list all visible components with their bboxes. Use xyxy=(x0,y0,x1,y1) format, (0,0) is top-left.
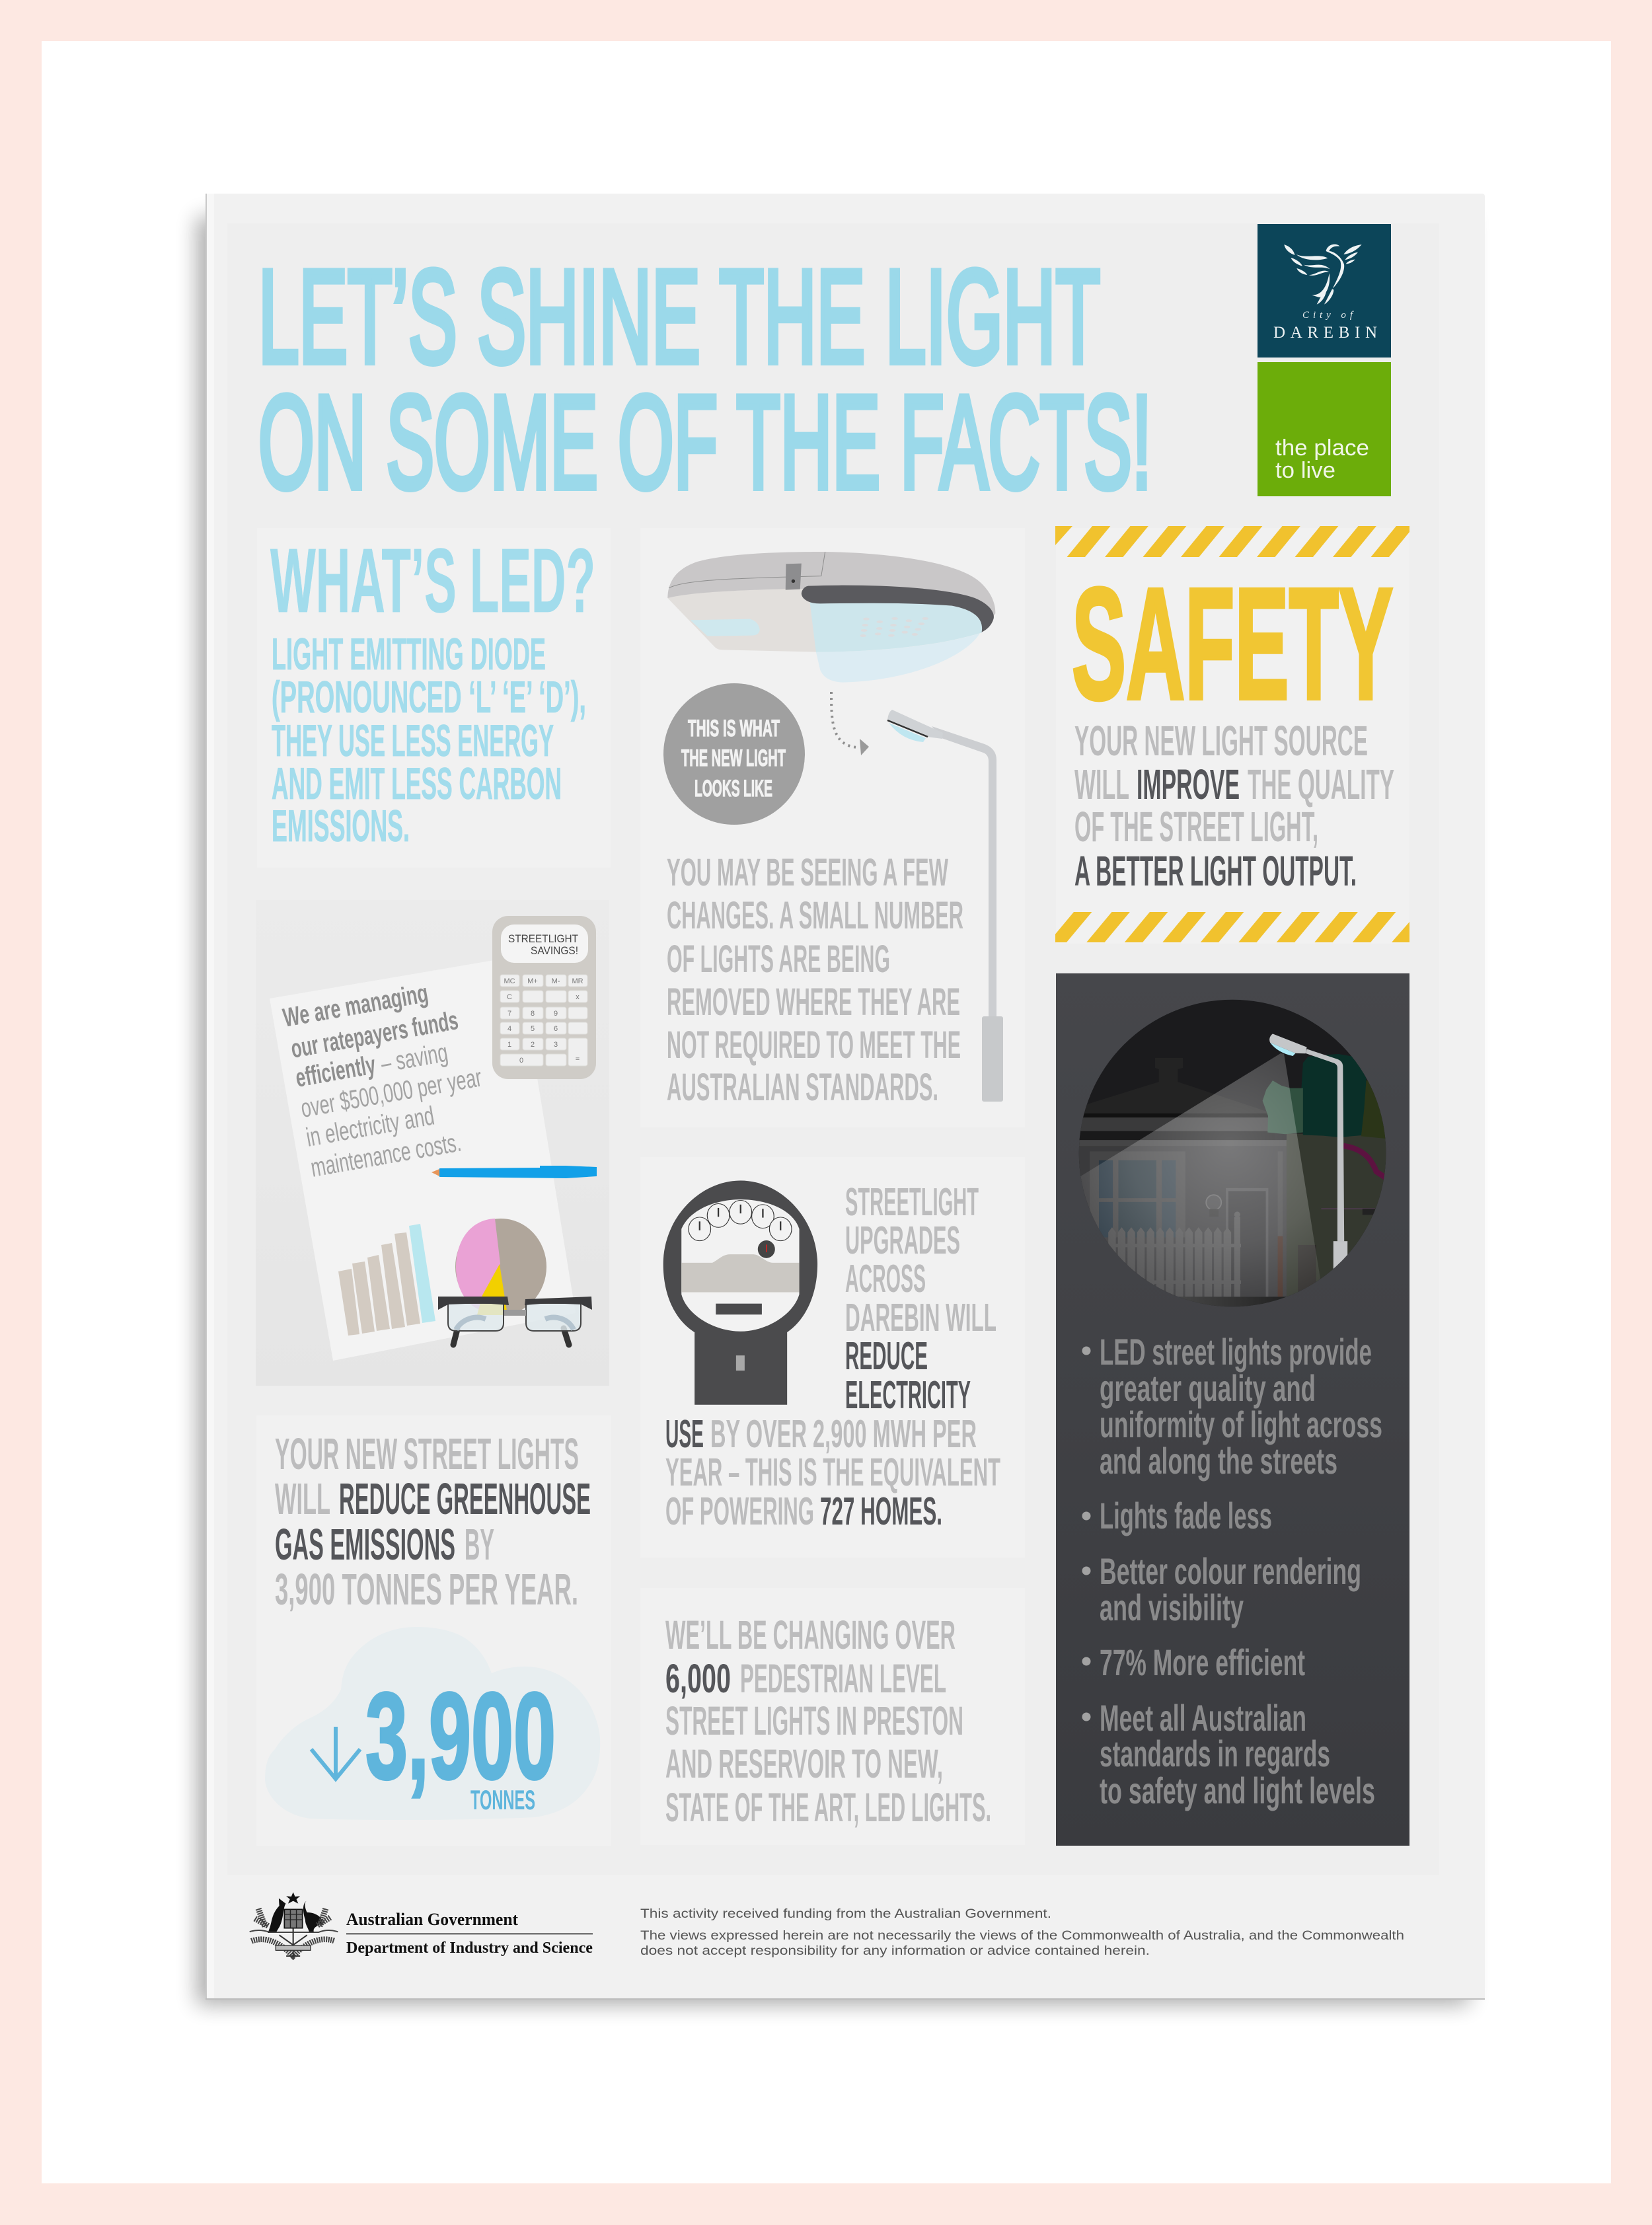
illustration: calculator: M- xyxy=(552,977,560,985)
illustration: calculator: 7 xyxy=(507,1010,511,1018)
footer: Australian Government crest xyxy=(250,1892,593,1957)
body text: BY xyxy=(465,1520,494,1569)
title xyxy=(258,243,1152,516)
logo: the place to live xyxy=(1258,362,1391,496)
paper text: in electricity and xyxy=(304,1101,437,1152)
paper text xyxy=(281,979,484,1183)
panel: greenhouse emissions: REDUCE GREENHOUSE xyxy=(339,1474,591,1524)
small meter xyxy=(1205,1194,1222,1209)
text block below meter xyxy=(665,1412,1000,1533)
body text: (PRONOUNCED ‘L’ ‘E’ ‘D’), xyxy=(272,672,586,722)
trees and garden xyxy=(1263,1054,1388,1308)
panel: safety xyxy=(1055,526,1409,944)
illustration: calculator: 8 xyxy=(531,1010,535,1018)
hazard stripes top xyxy=(1055,526,1409,557)
bar chart xyxy=(338,1224,435,1336)
panel: electricity xyxy=(640,1157,1025,1558)
bullet list: and visibility xyxy=(1100,1587,1244,1628)
bullet list: and along the streets xyxy=(1100,1440,1337,1482)
footer: funding disclaimer xyxy=(640,1907,1404,1958)
logo: the place to live: to live xyxy=(1275,458,1335,483)
panel: pedestrian lights: WE’LL BE CHANGING OVER xyxy=(665,1612,956,1657)
body text: EMISSIONS. xyxy=(272,801,410,851)
illustration: calculator: 6 xyxy=(554,1025,558,1033)
illustration: LED lamp head xyxy=(667,552,995,683)
bullet list: greater quality and xyxy=(1100,1367,1316,1409)
logo text: DAREBIN xyxy=(1273,324,1377,342)
body text: THE QUALITY xyxy=(1248,761,1394,808)
figure: 3,900 tonnes: TONNES xyxy=(470,1784,535,1815)
roof and chimney xyxy=(1079,1106,1287,1146)
bullet list: to safety and light levels xyxy=(1100,1770,1375,1811)
panel: pedestrian lights: STATE OF THE ART, LED LIGHTS. xyxy=(665,1785,991,1830)
body text: IMPROVE xyxy=(1137,761,1240,808)
figure: 3,900 tonnes: 3,900 xyxy=(365,1668,556,1805)
bullet list: Better colour rendering xyxy=(1100,1550,1361,1592)
door xyxy=(1226,1188,1268,1297)
illustration: calculator: 2 xyxy=(531,1041,535,1049)
bullet list: Meet all Australian xyxy=(1100,1697,1306,1739)
illustration: calculator: 5 xyxy=(531,1025,535,1033)
bin and posts xyxy=(1278,1231,1316,1297)
panel: pedestrian lights: AND RESERVOIR TO NEW, xyxy=(665,1741,943,1786)
body text: CHANGES. A SMALL NUMBER xyxy=(667,894,963,937)
illustration: calculator: MR xyxy=(572,977,583,985)
panel: greenhouse emissions xyxy=(256,1415,611,1846)
bullet list: 77% More efficient xyxy=(1100,1641,1305,1683)
logo: the place to live: the place xyxy=(1275,435,1369,461)
window xyxy=(1090,1151,1185,1237)
icon: bird xyxy=(1284,245,1362,305)
government name: Australian Government xyxy=(346,1910,518,1929)
panel: what's LED xyxy=(257,528,611,868)
text block beside meter: STREETLIGHT xyxy=(845,1180,979,1224)
body text: AND EMIT LESS CARBON xyxy=(272,759,562,809)
illustration: calculator: MC xyxy=(504,977,515,985)
illustration: night scene xyxy=(1078,999,1388,1310)
illustration: calculator: 1 xyxy=(507,1041,511,1049)
body text: WILL xyxy=(1074,761,1129,808)
figure: 3,900 tonnes xyxy=(365,1668,556,1815)
panel: dark benefits xyxy=(1056,973,1409,1846)
callout: this is what the new light looks like: THIS IS WHAT xyxy=(688,716,780,741)
fence xyxy=(1096,1211,1241,1297)
footer: funding disclaimer: The views expressed herein are not necessarily the views of the Commonwealth of Australia, and the Commonwealth xyxy=(640,1929,1404,1943)
arrow: dotted pointer xyxy=(831,692,869,755)
illustration: calculator: = xyxy=(576,1055,580,1063)
text block beside meter: DAREBIN WILL xyxy=(845,1296,996,1339)
bullet list: Lights fade less xyxy=(1100,1495,1272,1536)
body text: OF LIGHTS ARE BEING xyxy=(667,938,890,981)
illustration: calculator: C xyxy=(507,993,512,1001)
illustration: calculator: M+ xyxy=(527,977,538,985)
paper text: – saving xyxy=(379,1038,450,1078)
panel: pedestrian lights: 6,000 xyxy=(665,1656,731,1701)
body text: LIGHT EMITTING DIODE xyxy=(272,629,546,679)
body text: OF THE STREET LIGHT, xyxy=(1074,803,1318,850)
illustration: glasses xyxy=(438,1297,592,1345)
panel: pedestrian lights: PEDESTRIAN LEVEL xyxy=(740,1656,946,1701)
hazard stripes bottom xyxy=(1055,912,1409,942)
illustration: electricity meter xyxy=(663,1180,817,1405)
text block beside meter: REDUCE xyxy=(845,1334,928,1378)
body text: A BETTER LIGHT OUTPUT. xyxy=(1074,847,1357,895)
text block beside meter: ACROSS xyxy=(845,1257,926,1301)
body text: WILL xyxy=(275,1474,330,1524)
illustration: pen xyxy=(432,1166,597,1178)
ground xyxy=(1179,1297,1285,1306)
heading: WHAT’S LED? xyxy=(270,530,595,632)
callout: this is what the new light looks like: THE NEW LIGHT xyxy=(681,745,786,771)
panel: savings xyxy=(256,900,609,1386)
illustration: calculator: x xyxy=(576,993,580,1001)
text block beside meter: ELECTRICITY xyxy=(845,1373,971,1417)
body text: YOU MAY BE SEEING A FEW xyxy=(667,851,948,894)
paper text: over $500,000 per year xyxy=(299,1063,484,1123)
illustration: calculator: 3 xyxy=(554,1041,558,1049)
illustration: calculator xyxy=(492,916,596,1079)
paper text: efficiently xyxy=(293,1050,378,1093)
illustration: paper sheet xyxy=(270,956,576,1361)
bullet list xyxy=(1082,1331,1382,1811)
body text: 3,900 TONNES PER YEAR. xyxy=(275,1565,578,1614)
paper text: We are managing xyxy=(281,979,430,1033)
body text: AUSTRALIAN STANDARDS. xyxy=(667,1066,938,1109)
illustration: calculator: SAVINGS! xyxy=(531,944,578,957)
illustration: calculator: 0 xyxy=(519,1057,523,1065)
logo: City of Darebin xyxy=(1258,224,1391,358)
bullet list: LED street lights provide xyxy=(1100,1331,1372,1373)
illustration: street light xyxy=(887,710,1003,1102)
body text xyxy=(272,629,586,851)
pie chart xyxy=(455,1219,546,1315)
footer: funding disclaimer: This activity received funding from the Australian Government. xyxy=(640,1907,1051,1921)
panel: pedestrian lights xyxy=(640,1588,1025,1845)
footer: funding disclaimer: does not accept responsibility for any information or advice contained herein. xyxy=(640,1944,1150,1958)
text block beside meter xyxy=(845,1180,996,1417)
body text: THEY USE LESS ENERGY xyxy=(272,716,554,766)
illustration: calculator: 4 xyxy=(507,1025,511,1033)
paper text: our ratepayers funds xyxy=(289,1006,461,1064)
bullet list: uniformity of light across xyxy=(1100,1404,1382,1445)
light beam xyxy=(1078,1053,1323,1297)
poster shadow xyxy=(197,217,1469,2005)
text block below meter: YEAR – THIS IS THE EQUIVALENT xyxy=(665,1451,1000,1494)
house wall xyxy=(1078,1147,1287,1297)
body text: NOT REQUIRED TO MEET THE xyxy=(667,1024,961,1067)
body text: YOUR NEW STREET LIGHTS xyxy=(275,1429,579,1479)
body text xyxy=(667,851,963,1109)
arrow: down xyxy=(311,1727,360,1779)
illustration: cloud xyxy=(265,1627,600,1820)
logo text: City of xyxy=(1302,310,1354,321)
paper text: maintenance costs. xyxy=(309,1128,463,1183)
body text xyxy=(275,1429,591,1614)
body text xyxy=(1074,717,1394,895)
text block below meter: OF POWERING xyxy=(665,1490,814,1533)
bullet list: standards in regards xyxy=(1100,1733,1330,1774)
panel: pedestrian lights: STREET LIGHTS IN PRESTON xyxy=(665,1698,963,1743)
illustration: calculator: 9 xyxy=(554,1010,558,1018)
body text: REMOVED WHERE THEY ARE xyxy=(667,981,960,1024)
text block beside meter: UPGRADES xyxy=(845,1219,960,1262)
icon: coat of arms xyxy=(250,1892,338,1957)
lamp post xyxy=(1269,1034,1347,1274)
poster sheet xyxy=(206,194,1485,2000)
text block below meter: BY OVER 2,900 MWH PER xyxy=(710,1412,977,1456)
logo text xyxy=(1273,310,1377,342)
government name xyxy=(346,1910,593,1957)
text block below meter: USE xyxy=(665,1412,704,1456)
illustration: calculator: STREETLIGHT xyxy=(508,932,578,945)
callout: this is what the new light looks like xyxy=(663,683,805,825)
panel: new light xyxy=(640,528,1025,1127)
government name: Department of Industry and Science xyxy=(346,1940,593,1957)
body text: YOUR NEW LIGHT SOURCE xyxy=(1074,717,1368,765)
callout: this is what the new light looks like: LOOKS LIKE xyxy=(695,776,772,802)
text block below meter: 727 HOMES. xyxy=(820,1490,942,1533)
body text: GAS EMISSIONS xyxy=(275,1520,455,1569)
